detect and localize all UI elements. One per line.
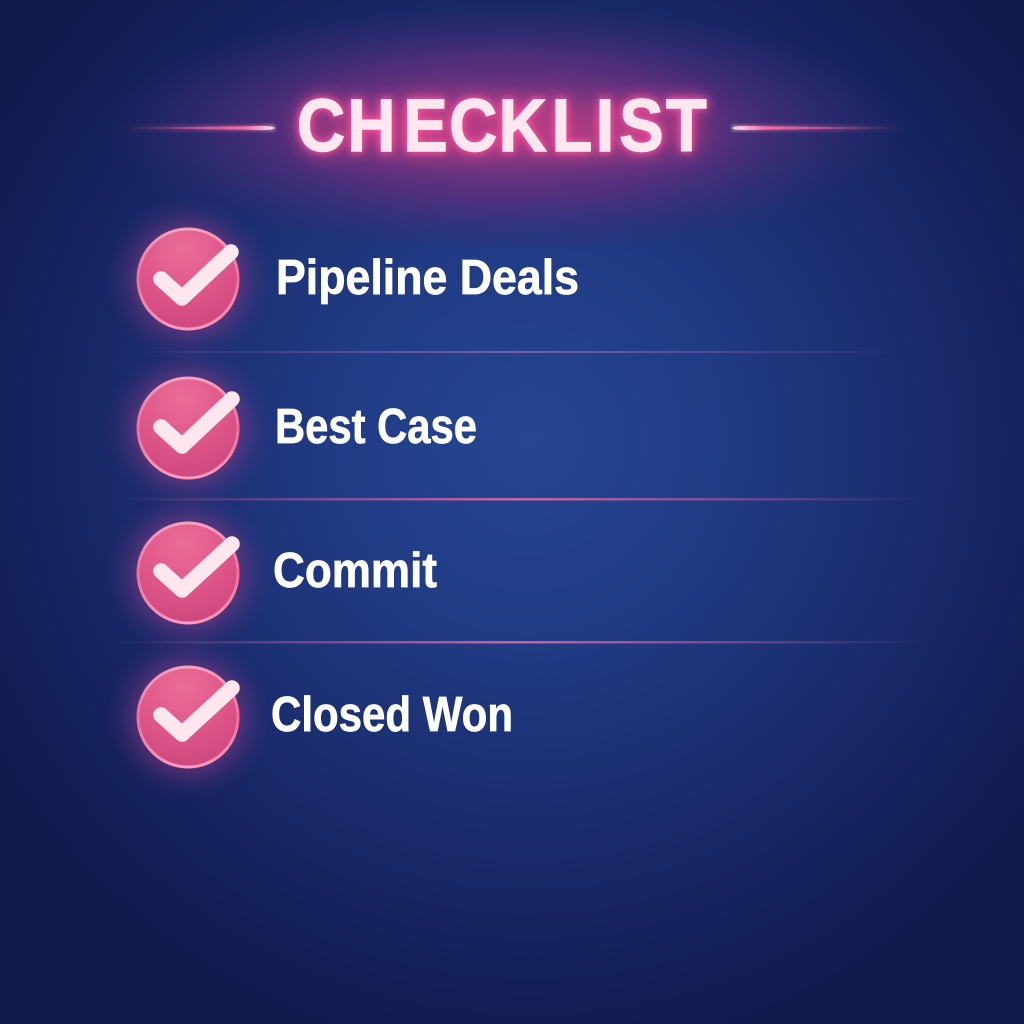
divider 2 bbox=[115, 498, 920, 500]
icon: check badge 3 bbox=[130, 515, 246, 631]
item 3: Commit bbox=[130, 515, 437, 631]
title accent line left bbox=[120, 125, 275, 131]
divider 3 bbox=[115, 641, 920, 644]
icon: check badge 2 bbox=[130, 370, 246, 486]
title: CHECKLIST: CHECKLIST bbox=[297, 84, 707, 167]
label: Closed Won: Closed Won bbox=[271, 688, 513, 742]
icon: check badge 1 bbox=[130, 221, 246, 337]
label: Commit: Commit bbox=[273, 544, 437, 598]
title glow bbox=[100, 0, 910, 255]
item 2: Best Case bbox=[130, 370, 477, 486]
label: Best Case: Best Case bbox=[275, 400, 477, 454]
title: CHECKLIST: CHECKLIST bbox=[297, 84, 707, 167]
title: CHECKLIST: CHECKLIST bbox=[297, 84, 707, 167]
divider 1 bbox=[120, 351, 910, 353]
icon: check badge 4 bbox=[130, 659, 246, 775]
item 4: Closed Won bbox=[130, 659, 513, 775]
label: Pipeline Deals: Pipeline Deals bbox=[276, 251, 579, 305]
item 1: Pipeline Deals bbox=[130, 221, 579, 337]
title accent line right bbox=[732, 125, 907, 131]
